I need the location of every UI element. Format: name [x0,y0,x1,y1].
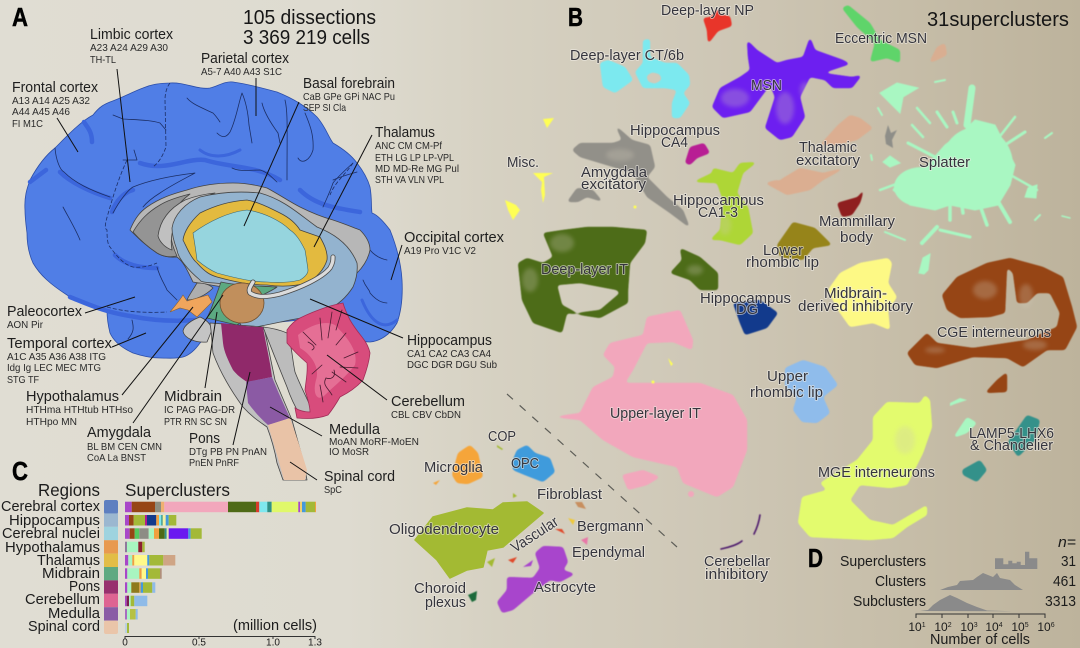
hypothalamus gray [187,283,213,300]
UMAP labels: Lower [763,242,803,259]
UMAP labels: Bergmann [577,518,644,535]
bar axis [122,636,322,648]
cluster: lower rhombic lip [777,222,832,260]
cluster: Bergmann [568,518,575,525]
label: spinal cord: SpC [324,485,342,496]
label: midbrain: PTR RN SC SN [164,417,227,428]
label: thalamus: ETH LG LP LP-VPL [375,153,454,164]
UMAP labels: CGE interneurons [937,324,1051,341]
UMAP labels: Vascular [508,513,562,556]
UMAP labels: Upper-layer IT [610,405,701,422]
label: frontal cortex: Frontal cortex [12,80,99,96]
thalamus in yellow [183,200,327,286]
column headings [38,480,230,500]
hippocampus in light blue [172,192,357,328]
cerebellum inner folds [298,310,358,402]
region names: Pons [69,578,100,595]
cluster: vascular [508,529,565,563]
n counts: 31 [1061,553,1076,570]
UMAP labels: CA1-3 [698,204,738,221]
column headings: Superclusters [125,480,230,500]
UMAP labels: Hippocampus [700,290,791,307]
label: thalamus: ANC CM CM-Pf [375,141,442,152]
log axis: 4 [999,622,1003,629]
cluster: CGE interneurons [907,258,1077,393]
small UMAP clusters [433,118,967,602]
panel B: UMAP of 31 superclusters [389,2,1077,613]
label: pons: DTg PB PN PnAN [189,447,267,458]
UMAP labels: excitatory [796,152,860,169]
UMAP labels: inhibitory [705,566,769,583]
region names: Cerebral nuclei [2,525,100,542]
cluster: microglia [452,445,483,484]
label: cerebellum: Cerebellum [391,394,465,410]
log axis: 10 [960,620,974,634]
label: hippocampus: DGC DGR DGU Sub [407,360,497,371]
n counts: n= [1058,534,1076,551]
UMAP labels: body [840,229,874,246]
label: spinal cord: Spinal cord [324,469,395,485]
label: temporal cortex: Temporal cortex [7,336,113,352]
log axis: 5 [1025,622,1029,629]
row names [840,553,926,610]
n counts [1045,534,1076,610]
UMAP labels: Hippocampus [673,192,764,209]
splatter cluster [871,80,1070,274]
dataset totals [243,6,376,49]
label: medulla: IO MoSR [329,447,369,458]
UMAP labels: Amygdala [581,164,648,181]
paleocortex in orange [170,295,212,317]
panel C: regions by superclusters [1,456,322,648]
UMAP labels [389,2,1054,611]
cluster: pink satellite [688,491,694,497]
dataset totals: 105 dissections [243,6,376,29]
label: pons: Pons [189,431,220,447]
region colour strip [104,500,118,634]
UMAP labels: rhombic lip [746,254,819,271]
cluster: deep-layer IT [518,227,647,333]
gray fragment in splatter [885,125,897,148]
bar: hippocampus [125,515,176,526]
UMAP labels: Upper [767,368,808,385]
bar: spinal cord [125,623,129,633]
astrocyte satellite [523,560,533,567]
label: thalamus: Thalamus [375,125,435,141]
cluster: MSN [712,37,862,140]
label: hypothalamus: HTHpo MN [26,417,77,428]
dataset totals: 3 369 219 cells [243,26,370,49]
basal forebrain nuclei in cyan [193,210,308,282]
cluster: cerebellar inhibitory [721,515,760,549]
UMAP labels: COP [488,428,516,445]
label: occipital cortex: Occipital cortex [404,230,505,246]
brainstem gray sheath [210,323,307,480]
label: amygdala: BL BM CEN CMN [87,442,162,453]
bar: pons [125,582,155,593]
spinal cord [268,418,307,480]
bar: cerebellum [125,596,147,606]
bar: thalamus [125,555,175,566]
label: basal forebrain: SEP SI Cla [303,103,346,114]
UMAP labels: Eccentric MSN [835,30,927,47]
label: frontal cortex: A13 A14 A25 A32 [12,96,90,107]
label: hypothalamus: HTHma HTHtub HTHso [26,405,133,416]
cluster: fibroblast [575,502,586,509]
cluster: upper-layer IT [552,310,747,497]
label: spinal cord [324,469,395,496]
cluster: astrocyte [497,546,575,613]
UMAP labels: Mammillary [819,213,895,230]
region names: Midbrain [42,565,100,582]
label: paleocortex: Paleocortex [7,304,83,320]
histogram: subclusters [920,595,1013,611]
stacked bars [125,502,316,633]
UMAP labels: Midbrain- [824,285,887,302]
log axis: 3 [974,622,978,629]
label: temporal cortex: STG TF [7,375,39,386]
label: temporal cortex: A1C A35 A36 A38 ITG [7,352,106,363]
UMAP labels: derived inhibitory [798,298,913,315]
label: frontal cortex [12,80,99,130]
label: thalamus: MD MD-Re MG Pul [375,164,459,175]
label: parietal cortex: A5-7 A40 A43 S1C [201,67,282,78]
brain illustration [25,82,402,480]
label: cerebellum: CBL CBV CbDN [391,410,461,421]
log axis: 2 [948,622,952,629]
label: hypothalamus: Hypothalamus [26,389,119,405]
label: midbrain: Midbrain [164,389,222,405]
label: paleocortex [7,304,83,331]
UMAP labels: Astrocyte [534,579,596,596]
log axis: 1 [922,622,926,629]
region names: Spinal cord [28,618,100,635]
cluster: ependymal [581,537,588,545]
large UMAP clusters [452,5,1077,613]
cluster: midbrain-derived inhibitory [828,258,897,330]
UMAP labels: Deep-layer CT/6b [570,47,684,64]
label: frontal cortex: FI M1C [12,119,43,130]
label: occipital cortex [404,230,505,257]
UMAP labels: Thalamic [799,139,857,156]
label: medulla: Medulla [329,422,381,438]
label: midbrain: IC PAG PAG-DR [164,405,235,416]
label: amygdala [87,425,162,464]
UMAP labels: Deep-layer NP [661,2,754,19]
brown nucleus [220,283,264,323]
row names: Subclusters [853,593,926,610]
UMAP labels: rhombic lip [750,384,823,401]
label: limbic cortex: TH-TL [90,55,116,66]
cluster: mammillary body [837,187,865,217]
panel letter A: A [12,2,28,32]
label: limbic cortex [90,27,174,66]
cerebellum [287,303,370,419]
UMAP labels: excitatory [581,176,646,193]
cluster: COP [497,445,503,450]
UMAP labels: Ependymal [572,544,645,561]
cluster: LAMP5-LHX6 and Chandelier [953,415,1040,482]
UMAP labels: & Chandelier [970,437,1053,454]
medulla [246,377,290,425]
cluster: small excitatory tan patch [929,43,947,63]
n counts: 461 [1053,573,1076,590]
UMAP labels: OPC [511,455,539,472]
label: pons: PnEN PnRF [189,458,239,469]
log axis: 10 [1011,620,1025,634]
mint satellite [950,398,967,406]
log axis: 10 [1037,620,1051,634]
label: hippocampus: CA1 CA2 CA3 CA4 [407,349,491,360]
cluster: upper rhombic lip [785,360,838,423]
UMAP labels: Microglia [424,459,484,476]
panel letter C: C [12,456,28,486]
region names: Thalamus [37,552,100,569]
log axis: 10 [934,620,948,634]
bar: cerebral cortex [125,502,316,512]
label: cerebellum [391,394,465,421]
log axis: 10 [908,620,922,634]
UMAP labels: MGE interneurons [818,464,935,481]
UMAP labels: Deep-layer IT [541,261,628,278]
label: hippocampus [407,333,497,371]
oligodendrocyte satellites [487,493,517,567]
UMAP labels: MSN [751,77,782,94]
label: medulla [329,422,419,458]
label: amygdala: Amygdala [87,425,152,441]
cluster: misc [505,118,673,384]
UMAP labels: Misc. [507,154,539,171]
cluster: hippocampus DG [733,300,778,335]
UMAP labels: CA4 [661,134,688,151]
cluster: hippocampus CA4 [685,143,710,165]
histogram: superclusters [995,552,1037,569]
cluster: microglia satellite [433,480,440,485]
cluster: oligodendrocyte [415,502,543,578]
label: paleocortex: AON Pir [7,320,44,331]
row names: Clusters [875,573,926,590]
label: occipital cortex: A19 Pro V1C V2 [404,246,476,257]
label: thalamus [375,125,459,186]
region names: Hippocampus [9,512,100,529]
panel letter B: B [568,2,583,32]
cluster: OPC [512,445,555,482]
corpus callosum gray band [130,183,370,300]
cluster: thalamic excitatory [765,115,873,195]
fornix [249,257,333,296]
label: basal forebrain: Basal forebrain [303,76,395,92]
label: midbrain [164,389,235,428]
cortex shading [30,122,397,325]
n counts: 3313 [1045,593,1076,610]
panel B title: 31superclusters [927,8,1069,31]
label: frontal cortex: A44 A45 A46 [12,107,70,118]
UMAP labels: Choroid [414,580,466,597]
log axis: 10 [985,620,999,634]
UMAP labels: Fibroblast [537,486,603,503]
cortex in blue [25,82,402,358]
light gray nucleus [183,317,212,342]
bar: medulla [125,609,138,620]
gray behind brainstem [263,327,312,416]
cluster: second deep-layer IT island [670,248,718,290]
cluster: MGE interneurons [798,395,932,540]
label: limbic cortex: Limbic cortex [90,27,174,43]
label: medulla: MoAN MoRF-MoEN [329,437,419,448]
sulci [55,83,387,339]
log axis [908,614,1055,634]
label: temporal cortex [7,336,113,386]
label: parietal cortex [201,51,290,78]
histogram: clusters [930,573,1033,590]
cluster: hippocampus CA1-3 [693,162,757,245]
label: thalamus: STH VA VLN VPL [375,175,444,186]
midbrain in green [207,282,277,325]
label: hypothalamus [26,389,133,428]
column headings: Regions [38,480,100,500]
cluster: eccentric MSN [842,5,900,63]
UMAP labels: DG [736,301,758,318]
panel A: brain anatomy [7,2,505,496]
UMAP labels: plexus [425,594,466,611]
label: pons [189,431,267,469]
panel D: cluster size histograms [808,534,1076,648]
panel letter D: D [808,543,823,573]
region names: Cerebellum [25,591,100,608]
UMAP labels: Cerebellar [704,553,770,570]
cluster: amygdala excitatory [567,125,690,228]
region names: Cerebral cortex [1,498,100,515]
UMAP labels: LAMP5-LHX6 [969,425,1054,442]
inner gray arc [158,193,215,250]
row names: Superclusters [840,553,926,570]
cluster: choroid plexus [468,591,477,602]
label: parietal cortex: Parietal cortex [201,51,290,67]
label: amygdala: CoA La BNST [87,453,146,464]
axis title: Number of cells [930,631,1030,648]
region names: Hypothalamus [5,539,100,556]
region names: Medulla [48,605,101,622]
axis unit: (million cells) [233,617,317,634]
dashed separator [507,394,677,547]
label: basal forebrain: CaB GPe GPi NAC Pu [303,92,395,103]
label: hippocampus: Hippocampus [407,333,492,349]
label: limbic cortex: A23 A24 A29 A30 [90,43,168,54]
label: temporal cortex: Idg Ig LEC MEC MTG [7,363,101,374]
cluster: deep-layer NP [703,8,732,44]
UMAP labels: Oligodendrocyte [389,521,499,538]
leader lines [57,69,403,480]
bar: cerebral nuclei [125,528,202,539]
bar: hypothalamus [125,542,145,552]
dark gray layer [133,194,190,257]
bar: midbrain [125,568,162,579]
log axis: 6 [1051,622,1055,629]
cluster: deep-layer CT/6b [600,39,690,118]
UMAP labels: Splatter [919,154,970,171]
label: basal forebrain [303,76,395,114]
region names [1,498,101,635]
UMAP labels: Hippocampus [630,122,720,139]
speckled density gaps [522,82,1047,454]
pons [221,323,272,382]
